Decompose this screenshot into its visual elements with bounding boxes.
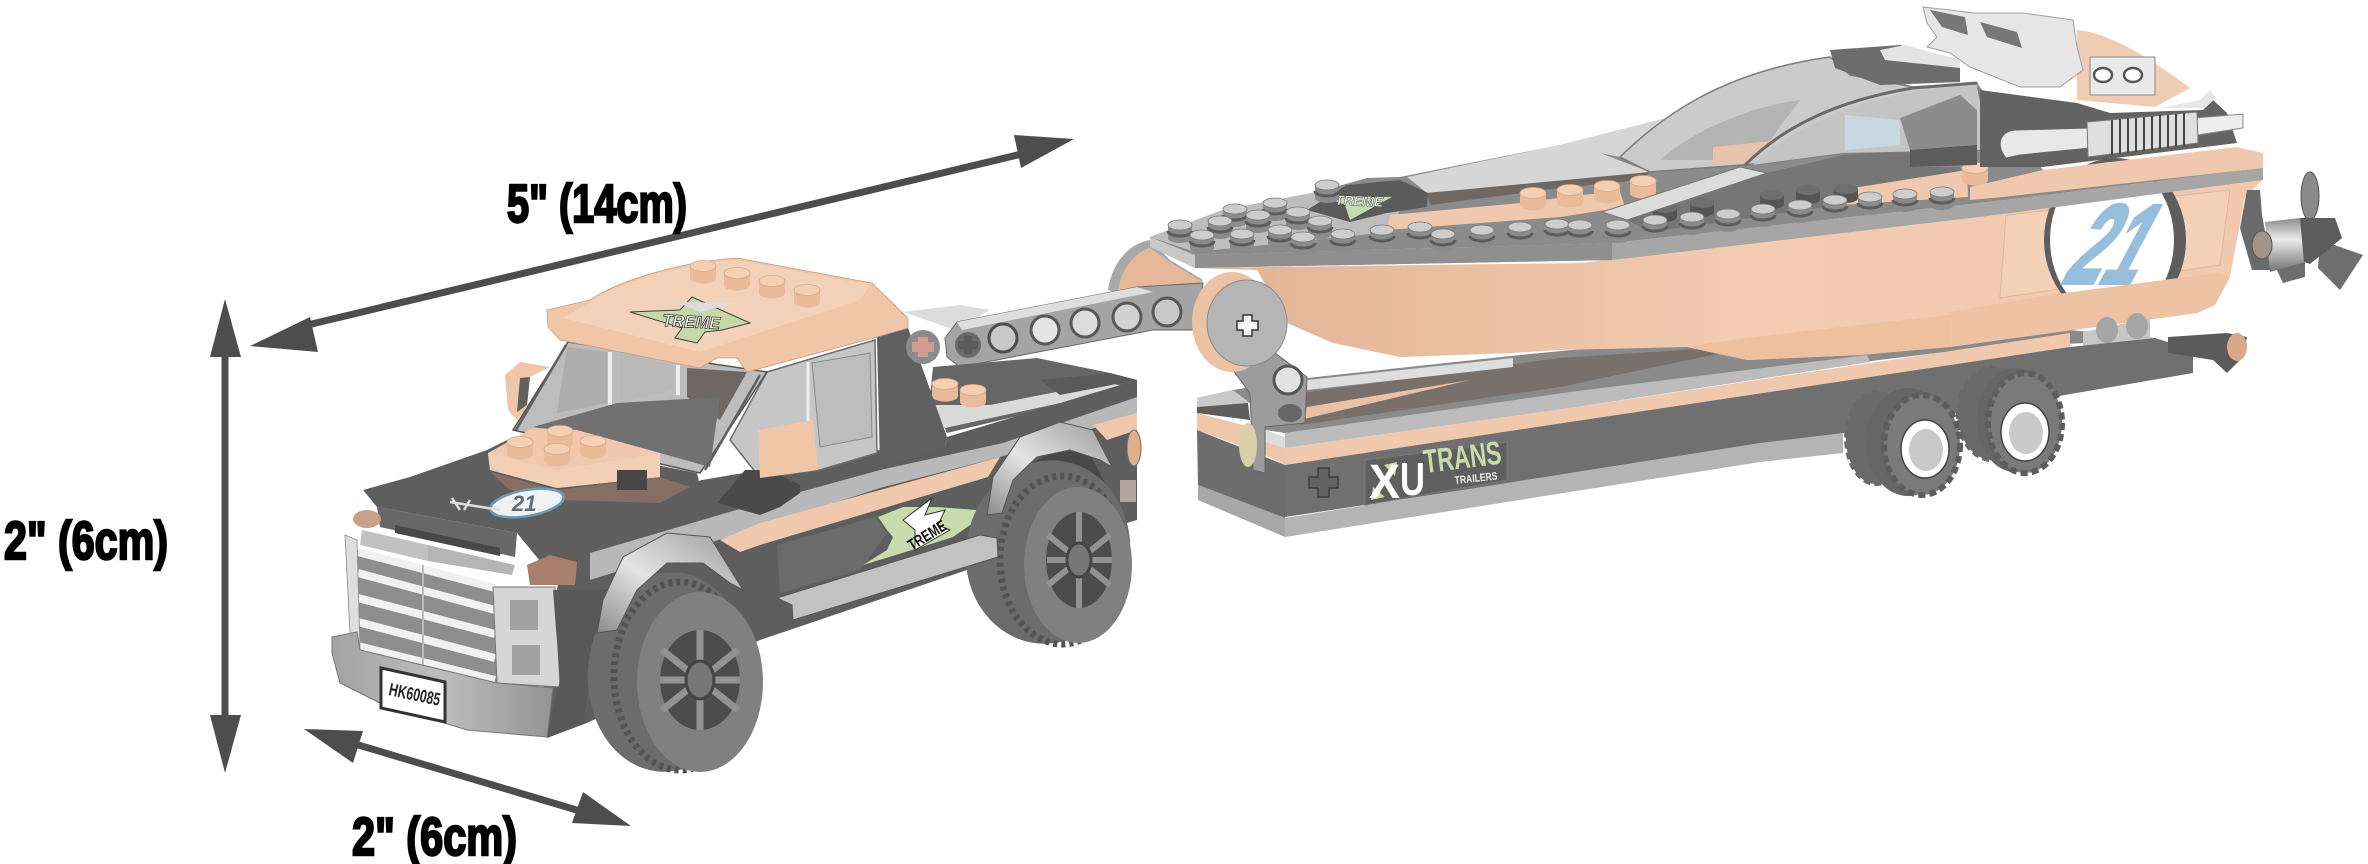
engine studs row	[1830, 45, 1960, 85]
number 21 roundel: 21	[2047, 183, 2185, 307]
boat canopy	[1602, 57, 1990, 220]
right mirror	[717, 420, 818, 515]
orange lamps	[353, 510, 577, 585]
boat gray rail	[1150, 168, 2263, 268]
boat hull	[1195, 180, 2263, 360]
hood 21 badge	[450, 484, 566, 522]
Xutrans logo: U	[1400, 453, 1425, 505]
label: length: 5" (14cm)	[507, 174, 687, 234]
number panel	[2000, 190, 2230, 298]
hood 21 badge: 21	[511, 491, 536, 516]
peach body stripe	[720, 457, 1000, 552]
number 21 roundel	[2044, 158, 2186, 322]
lower strip	[1285, 433, 1843, 537]
clear headlight	[493, 587, 560, 687]
Xutrans logo	[1365, 434, 1507, 509]
license plate	[381, 668, 445, 722]
dimension: width arrow	[304, 729, 631, 826]
Xutrans logo: X	[1369, 456, 1400, 509]
boat deck xtreme logo: TREME	[1335, 192, 1384, 210]
left mirror	[505, 362, 550, 420]
pickup truck	[332, 258, 1145, 780]
trailer wheel front	[1846, 388, 1960, 496]
side step	[777, 535, 998, 620]
truck body side	[517, 380, 1137, 738]
boat rear ring behind tow beam	[1108, 240, 1203, 305]
windshield and cab interior	[513, 342, 767, 473]
boat support arm	[1223, 347, 1307, 473]
glossy forward deck strip	[1407, 118, 1667, 193]
tow beam	[903, 283, 1203, 367]
label: height: 2" (6cm)	[4, 511, 168, 571]
hood brick	[488, 426, 690, 503]
back cab pillar	[877, 328, 947, 470]
rear end block	[2168, 333, 2247, 373]
license plate: HK60085	[387, 679, 442, 710]
red cross connector	[906, 330, 940, 364]
rear wheel	[951, 447, 1145, 657]
Xutrans logo: TRAILERS	[1454, 471, 1498, 487]
dark mid deck	[1627, 150, 1968, 232]
gray waist stripe	[590, 397, 1137, 580]
roof xtreme graphic: TREME	[662, 311, 721, 333]
side xtreme graphic: TREME	[905, 518, 950, 554]
engine grate	[2090, 57, 2155, 95]
Xutrans logo: TRANS	[1421, 434, 1503, 480]
roof xtreme graphic	[630, 297, 750, 343]
dark side panel	[1285, 338, 2193, 517]
engine exhaust pipe	[2000, 90, 2243, 158]
trailer near side	[1197, 313, 2247, 537]
engine dark housing	[1980, 90, 2237, 167]
dimension: height arrow	[210, 299, 241, 773]
dimension: length arrow	[250, 135, 1074, 352]
deck studs	[1168, 162, 1988, 255]
propeller	[2240, 172, 2363, 290]
plus mark on trailer	[1309, 468, 1338, 497]
boat deck xtreme logo	[1307, 180, 1428, 222]
front bumper	[332, 632, 553, 737]
lego bracket	[2083, 318, 2150, 350]
door panel	[777, 517, 887, 593]
trailer wheel rear	[1958, 368, 2062, 473]
lower hull band	[1950, 273, 2230, 347]
rear wheel arch shadow	[1000, 451, 1120, 560]
engine blower	[1830, 7, 2155, 95]
front grille	[345, 530, 515, 683]
boat deck	[1150, 57, 2263, 255]
side window	[730, 340, 877, 478]
front fender	[597, 533, 743, 633]
front wheel	[578, 564, 763, 780]
gray near rail	[1285, 355, 1870, 448]
front face	[1197, 430, 1285, 518]
lower body corner	[547, 590, 605, 738]
truck bed	[930, 358, 1137, 433]
engine rear peach arc	[2077, 30, 2190, 107]
side xtreme graphic	[863, 498, 977, 565]
peach deck panels	[1387, 192, 1625, 230]
rear fender	[987, 422, 1112, 515]
trailer inner rail	[1197, 320, 2155, 433]
cab roof	[547, 258, 908, 372]
hood	[363, 437, 703, 533]
boat support disc	[1192, 272, 1287, 372]
peach stripe	[1285, 333, 2070, 465]
orange tail light	[1127, 430, 1141, 466]
boat	[1150, 7, 2363, 360]
